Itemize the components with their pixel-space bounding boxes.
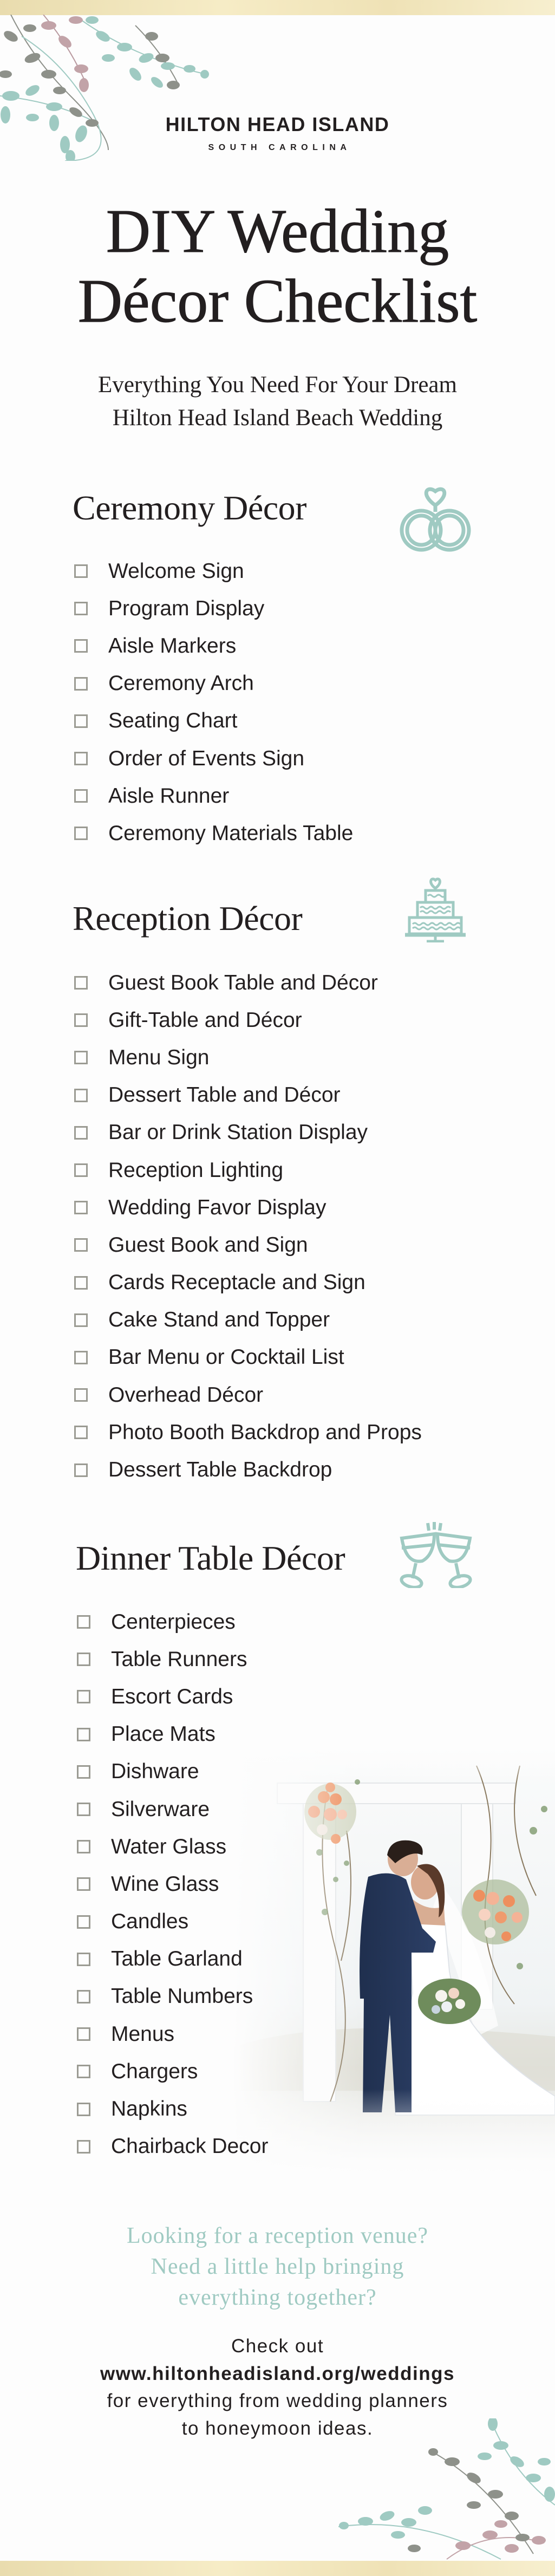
list: dinner table: Wine Glass <box>111 1872 219 1896</box>
icon: toasting glasses <box>400 1522 472 1588</box>
list: ceremony: Order of Events Sign <box>108 747 304 770</box>
list: dinner table: Chargers <box>111 2060 198 2083</box>
arch <box>277 1783 515 2102</box>
callout: website: to honeymoon ideas. <box>182 2418 373 2438</box>
list: dinner table: Table Runners <box>111 1648 247 1671</box>
callout: website: Check out <box>231 2336 324 2357</box>
list: reception: Overhead Décor <box>108 1383 263 1407</box>
list: ceremony: Seating Chart <box>108 709 237 732</box>
photo: couple under arch <box>260 1766 555 2129</box>
list: reception: Cards Receptacle and Sign <box>108 1271 365 1294</box>
subtitle <box>98 372 457 431</box>
list: reception: Cake Stand and Topper <box>108 1308 330 1331</box>
leaves top-left <box>0 15 209 161</box>
icon: cake <box>405 877 466 942</box>
list: dinner table: Candles <box>111 1910 188 1933</box>
top gold bar <box>0 0 555 15</box>
list: reception: Gift-Table and Décor <box>108 1009 302 1032</box>
list: reception: Dessert Table Backdrop <box>108 1458 332 1481</box>
title: DIY Wedding <box>106 197 449 265</box>
callout question: Looking for a reception venue? <box>127 2223 428 2248</box>
heading: reception: Reception Décor <box>73 899 302 938</box>
list: reception: Bar or Drink Station Display <box>108 1121 368 1144</box>
logo: HILTON HEAD ISLAND <box>166 113 389 135</box>
list: dinner table: Table Garland <box>111 1947 243 1970</box>
list: dinner table: Place Mats <box>111 1722 216 1746</box>
list: dinner table: Escort Cards <box>111 1685 233 1708</box>
list: ceremony: Welcome Sign <box>108 560 244 583</box>
list: ceremony: Ceremony Arch <box>108 672 254 695</box>
list: reception: Reception Lighting <box>108 1159 283 1182</box>
list: ceremony <box>74 560 353 845</box>
logo <box>166 113 389 152</box>
callout: website: for everything from wedding planners <box>107 2390 448 2411</box>
dress <box>395 1918 555 2115</box>
heading: ceremony: Ceremony Décor <box>73 489 306 527</box>
callout question: Need a little help bringing <box>151 2254 404 2279</box>
list: reception: Dessert Table and Décor <box>108 1083 341 1107</box>
bottom gold bar <box>0 2561 555 2576</box>
leaves bottom-right <box>338 2418 555 2560</box>
list: dinner table: Centerpieces <box>111 1610 236 1634</box>
title: Décor Checklist <box>78 266 477 335</box>
heading: dinner table: Dinner Table Décor <box>76 1539 345 1577</box>
list: reception: Photo Booth Backdrop and Props <box>108 1421 422 1444</box>
list: reception: Guest Book and Sign <box>108 1233 308 1257</box>
flowers right <box>462 1879 529 1944</box>
callout: website: www.hiltonheadisland.org/weddings <box>100 2363 455 2384</box>
callout: website <box>100 2336 455 2438</box>
bride head/shoulders <box>412 1898 445 1926</box>
list: dinner table: Menus <box>111 2022 174 2046</box>
list: dinner table: Chairback Decor <box>111 2135 268 2158</box>
title <box>78 197 478 335</box>
list: reception <box>74 971 422 1481</box>
list: dinner table <box>77 1610 268 2158</box>
icon: rings <box>400 487 471 551</box>
list: reception: Bar Menu or Cocktail List <box>108 1345 344 1369</box>
list: reception: Menu Sign <box>108 1046 209 1069</box>
logo: SOUTH CAROLINA <box>208 143 351 152</box>
subtitle: Everything You Need For Your Dream <box>98 372 457 398</box>
bouquet <box>418 1979 481 2024</box>
callout question: everything together? <box>178 2285 377 2310</box>
list: dinner table: Dishware <box>111 1760 199 1783</box>
subtitle: Hilton Head Island Beach Wedding <box>113 405 442 431</box>
greenery branches <box>322 1766 536 2102</box>
veil <box>433 1885 498 2037</box>
flowers left <box>304 1783 356 1844</box>
list: reception: Wedding Favor Display <box>108 1196 326 1219</box>
list: dinner table: Water Glass <box>111 1835 226 1858</box>
list: ceremony: Aisle Markers <box>108 634 236 658</box>
list: reception: Guest Book Table and Décor <box>108 971 378 994</box>
list: ceremony: Ceremony Materials Table <box>108 822 353 845</box>
callout question <box>127 2223 428 2310</box>
groom <box>360 1874 436 2112</box>
list: ceremony: Program Display <box>108 597 264 620</box>
list: dinner table: Table Numbers <box>111 1985 253 2008</box>
list: dinner table: Napkins <box>111 2097 187 2120</box>
list: dinner table: Silverware <box>111 1798 210 1821</box>
list: ceremony: Aisle Runner <box>108 784 229 808</box>
